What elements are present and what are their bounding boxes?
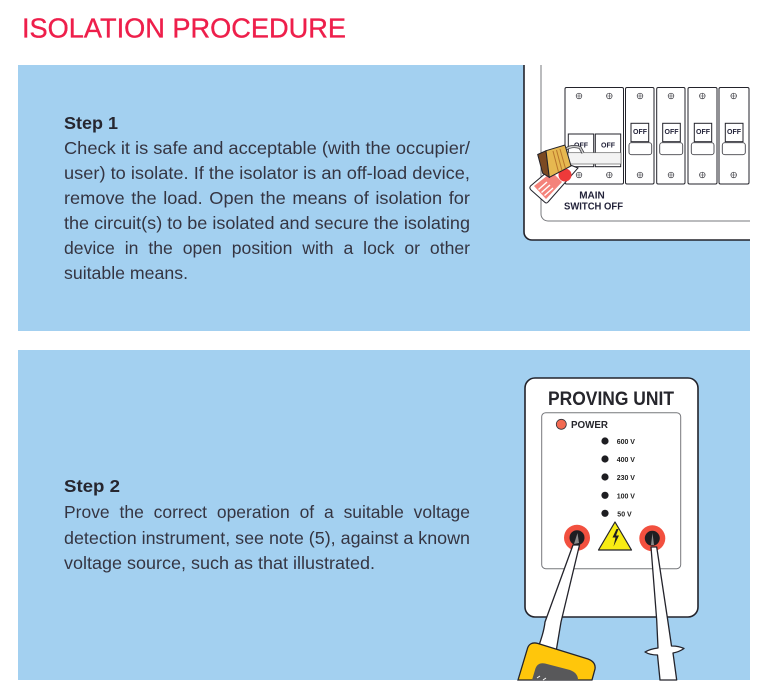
step 1 body text xyxy=(64,138,470,283)
step 1 body text: suitable means. xyxy=(64,263,188,283)
main switch xyxy=(565,88,624,184)
main switch: OFF xyxy=(601,142,616,150)
voltage indicators: 400 V xyxy=(617,457,635,464)
step 2 body text: voltage source, such as that illustrated. xyxy=(64,553,375,573)
panel: step 1 xyxy=(18,65,750,331)
proving unit illustration xyxy=(518,378,698,680)
breaker modules: OFF xyxy=(633,129,648,136)
voltage indicators: 600 V xyxy=(617,439,635,446)
voltage indicators: 230 V xyxy=(617,475,635,482)
control face xyxy=(542,413,681,569)
step 2 body text: Prove the correct operation of a suitable voltage xyxy=(64,502,470,522)
step 1 body text: device in the open position with a lock or other xyxy=(64,238,470,258)
voltage indicators: 50 V xyxy=(617,511,632,518)
main switch off label: SWITCH OFF xyxy=(564,202,623,213)
main switch: OFF xyxy=(574,142,589,150)
voltage indicators xyxy=(601,437,635,518)
left tester probe xyxy=(518,533,595,680)
voltage indicators: 100 V xyxy=(617,493,635,500)
breaker modules: OFF xyxy=(664,129,679,136)
title: ISOLATION PROCEDURE xyxy=(22,12,346,44)
breaker modules xyxy=(626,88,749,184)
step 1 body text: user) to isolate. If the isolator is an off-load device, xyxy=(64,163,470,183)
control face: POWER xyxy=(571,419,608,431)
main switch off label: MAIN xyxy=(579,190,605,202)
step 1 body text: remove the load. Open the means of isolation for xyxy=(64,188,470,208)
panel: step 2 xyxy=(18,350,750,680)
main switch off label xyxy=(564,190,623,213)
step 1 body text: Check it is safe and acceptable (with the occupier/ xyxy=(64,138,470,158)
icon: padlock and tag xyxy=(530,145,583,203)
breaker modules: OFF xyxy=(727,129,742,136)
proving unit heading: PROVING UNIT xyxy=(548,389,674,410)
consumer unit illustration xyxy=(524,65,750,240)
breaker modules: OFF xyxy=(696,129,711,136)
step 1 body text: the circuit(s) to be isolated and secure the isolating xyxy=(64,213,470,233)
icon: hazard triangle xyxy=(598,522,632,550)
step 2 body text: detection instrument, see note (5), against a known xyxy=(64,528,470,548)
right tester probe xyxy=(645,533,684,680)
icon: terminals xyxy=(564,525,665,551)
tester body xyxy=(518,643,595,680)
step 2 heading: Step 2 xyxy=(64,476,120,496)
step 2 body text xyxy=(64,502,470,573)
step 1 heading: Step 1 xyxy=(64,113,118,133)
